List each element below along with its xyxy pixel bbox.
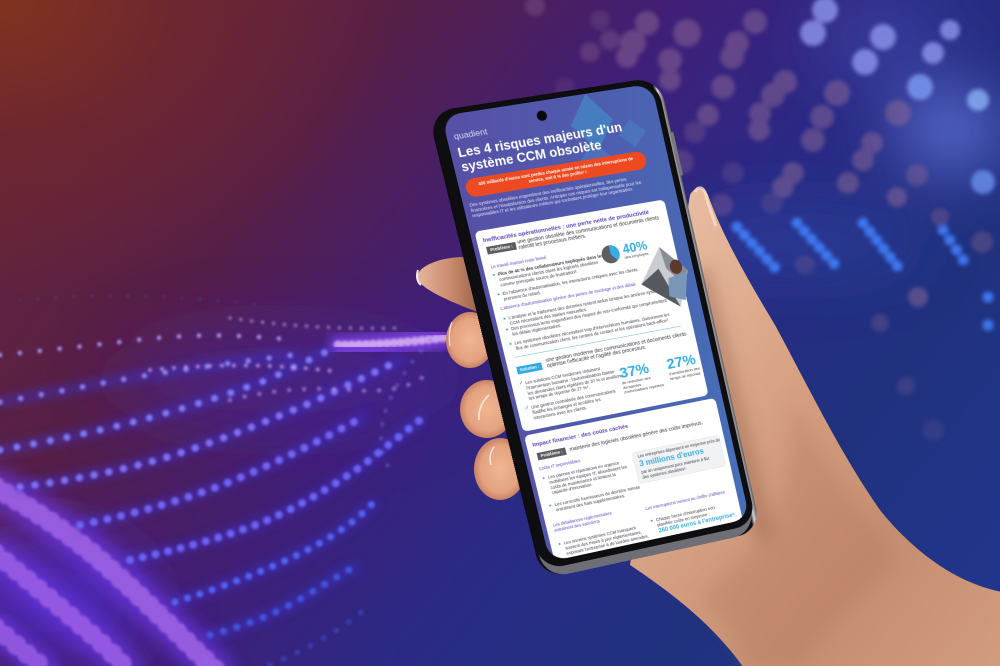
bullets group 1: communications clients citent les logiciels obsolètes — [499, 260, 599, 282]
bullets: coûts de maintenance et limitent la — [550, 472, 616, 490]
panel: operational inefficiencies — [474, 199, 709, 432]
check list: ✓ — [519, 380, 524, 386]
screen — [442, 84, 750, 562]
bullets group 1: comme principale source de frustration². — [500, 269, 578, 287]
stat: 27%: d'amélioration des — [669, 366, 700, 376]
stat: 37%: de réduction des — [622, 376, 651, 385]
check list: les temps de réponse de 27 %⁴. — [528, 385, 590, 401]
check list: Une gestion centralisée des communications — [531, 388, 616, 410]
bullets group 2: Des processus lents engendrent des risques de non-conformité qui compromettent — [510, 298, 667, 331]
callout: red pill: 400 milliards d'euros sont perdus chaque année en raison des interruptions de — [478, 156, 633, 186]
problem text: une gestion obsolète des communications et documents clients — [517, 215, 660, 245]
hand: palm shading — [700, 270, 900, 666]
subheading: Coûts IT imprévisibles — [538, 458, 581, 471]
subheading: entraînent des sanctions — [554, 518, 600, 533]
bullets group 2: CCM nécessitent des saisies manuelles. — [509, 307, 587, 326]
stat: 27% — [665, 351, 701, 381]
phone bezel — [430, 79, 757, 570]
solution text: une gestion moderne des communications et documents clients — [545, 331, 687, 363]
heading: Impact financier : des coûts cachés — [532, 423, 629, 448]
intro text: Des systèmes obsolètes engendrent des inefficacités opérationnelles, des pertes — [469, 177, 627, 208]
title: système CCM obsolète — [460, 138, 603, 175]
subheading: Les défaillances réglementaires — [552, 510, 612, 528]
bullets group 1: Plus de 40 % des collaborateurs impliqués dans les — [497, 253, 604, 277]
check list: l'intervention humaine : l'automatisation baisse — [526, 369, 615, 391]
header decoration: diamonds — [571, 94, 613, 151]
callout box: 3 millions: par an uniquement pour maintenir à flot — [641, 456, 710, 475]
solution text: optimise l'efficacité et l'agilité des processus. — [546, 345, 647, 369]
hand: fingers — [417, 257, 526, 500]
hand: palm and thumb — [630, 188, 1000, 666]
dot rows — [0, 296, 430, 665]
bright blue-violet bokeh — [800, 0, 995, 194]
stat: 37%: d'informations répétées — [624, 383, 664, 395]
problem tag: Problème : — [540, 449, 563, 458]
solution text — [545, 290, 687, 369]
phone outer frame — [428, 77, 761, 579]
side button — [671, 132, 683, 176]
solution tag — [516, 362, 543, 374]
check list: ✓ — [524, 405, 530, 411]
stat: 40 percent: 40% — [621, 238, 649, 256]
bullet — [558, 525, 649, 556]
solution tag: Solution : — [519, 364, 540, 372]
glow under dot rows — [0, 350, 420, 635]
bullets group 2: L'analyse et le traitement des données restent ardus lorsque les anciens systèmes — [508, 287, 664, 320]
bullet: Les anciens systèmes CCM manquent — [563, 525, 636, 545]
panel: financial impact — [524, 398, 744, 566]
callout box: 3 millions: Les entreprises dépensent en moyenne près de — [637, 438, 720, 459]
intro text: financières et l'insatisfaction des clients. Anticiper ces risques est indispensable pour les — [470, 180, 642, 213]
intro text: responsables IT et les utilisateurs métiers qui souhaitent protéger leur organisation. — [472, 186, 634, 218]
bullets — [542, 460, 640, 512]
bullets group 2: les délais réglementaires. — [512, 323, 562, 337]
logo: quadient — [453, 127, 488, 142]
bullets group 2: Les systèmes obsolètes nécessitent trop d'interventions humaines, cloisonnent les — [514, 312, 670, 346]
phone — [433, 80, 757, 574]
stat: 37%: demandes — [623, 382, 642, 390]
purple wave bands — [0, 223, 988, 666]
problem tag: Problème : — [490, 244, 513, 252]
bullet with stat: Chaque heure d'interruption non — [655, 505, 715, 522]
stat: 27%: temps de réponse — [670, 371, 701, 381]
callout box: 3 millions: 3 millions d'euros — [639, 447, 705, 468]
problem text: ralentit les processus métiers. — [518, 234, 587, 251]
bullets group 2: flux de communication client, les centres de contact et les opérations back-office³. — [515, 317, 670, 351]
bullets group 1: prennent du retard. — [503, 290, 541, 301]
bright band — [330, 336, 450, 348]
bullets: capacité d'innovation. — [551, 482, 593, 495]
bullets: mobilisent les équipes IT, alourdissent les — [549, 464, 627, 485]
stat: 27%: 27% — [665, 351, 697, 372]
callout box: 3 millions: des systèmes obsolètes⁵. — [642, 466, 687, 480]
bullets group 1: En l'absence d'automatisation, les interactions critiques avec les clients — [502, 267, 638, 296]
bullets group 2 — [503, 287, 680, 351]
header decoration: small diamond — [619, 119, 646, 147]
phone lower metal edge — [539, 509, 756, 579]
bullet: souvent des mises à jour réglementaires, — [565, 529, 642, 551]
camera — [536, 110, 548, 122]
check list: les demandes client répétées de 37 % et améliore — [527, 373, 623, 396]
bullet: exposant l'entreprise à de lourdes amendes. — [566, 533, 649, 556]
bullet with stat: planifiée coûte en moyenne : — [657, 511, 710, 527]
bullet with stat: 260 000 euros à l'entreprise⁶. — [658, 511, 737, 534]
problem tag — [537, 447, 567, 460]
stat: pie 40% — [601, 245, 620, 264]
subheading: Les interruptions nuisent au chiffre d'affaires — [645, 490, 725, 511]
title: Les 4 risques majeurs d'un — [456, 120, 623, 160]
stat: 37%: 37% — [618, 360, 651, 382]
heading: Inefficacités opérationnelles : une perte nette de productivité — [482, 209, 649, 244]
callout: red pill — [464, 150, 648, 198]
photo: woman at laptop — [641, 246, 688, 307]
check list: interactions avec les clients. — [533, 405, 587, 420]
check list: fluidifie les échanges et accélère les — [532, 397, 601, 415]
subheading: L'absence d'automatisation génère des pertes de stockage et des délais — [500, 282, 636, 311]
callout box: 3 millions — [632, 435, 726, 484]
problem text: maintenir des logiciels obsolètes génère des coûts imprévus. — [569, 420, 703, 452]
bullets: entraînent des frais supplémentaires. — [555, 493, 626, 512]
muted pink bokeh — [525, 0, 993, 441]
bullets group 1 — [492, 253, 638, 302]
check list — [519, 366, 623, 420]
callout: red pill: service, soit 9 % des profits¹ ! — [528, 169, 587, 184]
bullets: Les pannes et réparations en urgence — [547, 460, 620, 480]
subheading: Le travail manuel reste freiné — [490, 255, 547, 270]
check list: Les solutions CCM modernes réduisent — [525, 366, 600, 385]
bullets: Les correctifs fournisseurs de dernière minute — [554, 485, 640, 507]
header decoration: lower diamond — [581, 143, 611, 174]
stat: 40 percent: des employés — [624, 251, 649, 260]
stat: 37% — [618, 360, 664, 395]
blue bokeh lines — [737, 223, 988, 325]
problem tag — [486, 242, 517, 255]
hand: thumb nail highlight — [695, 188, 716, 226]
